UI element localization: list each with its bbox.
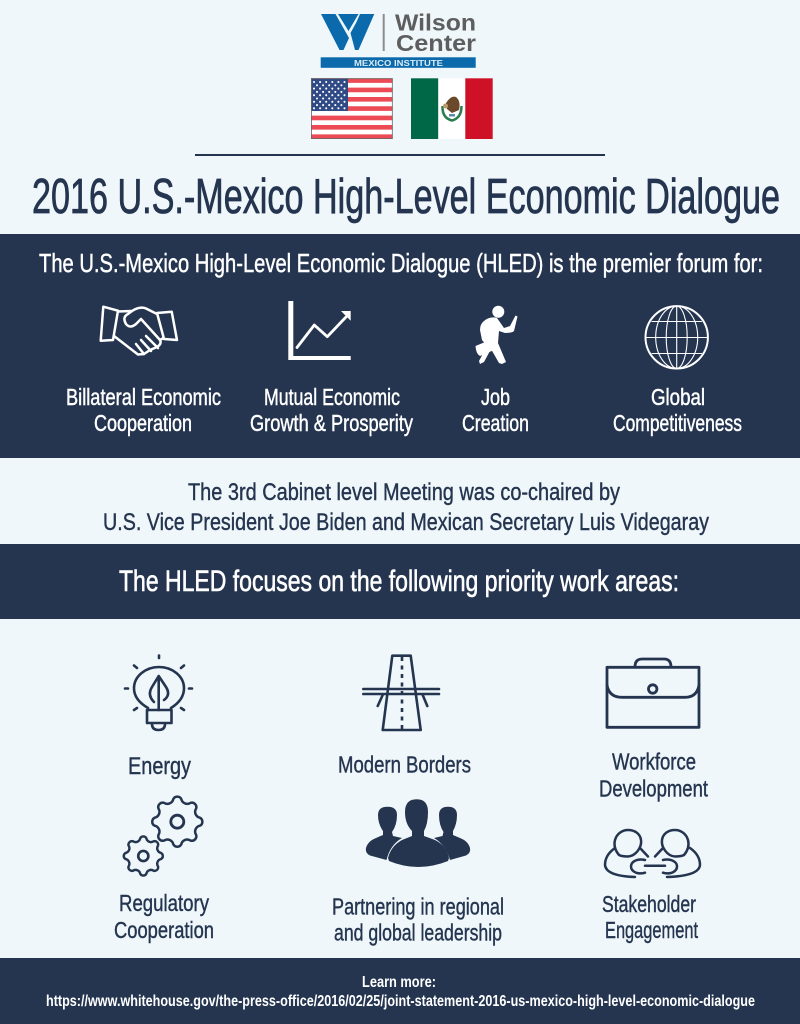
label: regulatory cooperation xyxy=(114,890,214,943)
label: stakeholder engagement: Engagement xyxy=(605,917,698,943)
icon: handshake xyxy=(101,307,177,354)
flag: United States xyxy=(311,78,393,139)
panel: premier forum xyxy=(0,234,800,458)
icon: modern borders highway xyxy=(363,656,439,730)
label: stakeholder engagement: Stakeholder xyxy=(602,891,696,917)
label: job creation: Job xyxy=(481,384,510,410)
text block: co-chairs xyxy=(103,479,709,536)
label: partnering in regional and global leadership: Partnering in regional xyxy=(332,894,504,920)
icon: workforce briefcase xyxy=(607,659,699,727)
flag: Mexico xyxy=(411,78,493,139)
large gear xyxy=(152,797,202,847)
label: bilateral cooperation: Cooperation xyxy=(94,410,192,436)
label: regulatory cooperation: Cooperation xyxy=(114,917,214,943)
label: growth and prosperity xyxy=(250,384,413,436)
panel: footer learn more xyxy=(0,958,800,1024)
small gear xyxy=(124,836,163,876)
label: global competitiveness: Competitiveness xyxy=(613,410,742,436)
panel: priority work areas heading xyxy=(0,544,800,619)
label: partnering in regional and global leadership: and global leadership xyxy=(334,920,502,946)
label: workforce development: Development xyxy=(599,776,708,802)
label: growth and prosperity: Growth & Prosperity xyxy=(250,410,413,436)
icon: growth chart xyxy=(288,301,351,360)
label: workforce development xyxy=(599,748,708,802)
label: job creation: Creation xyxy=(462,410,529,436)
label: job creation xyxy=(462,384,529,436)
label: bilateral cooperation xyxy=(66,384,221,436)
label: partnering in regional and global leadership xyxy=(332,894,504,946)
icon: energy light bulb xyxy=(125,656,192,730)
logo mark: W xyxy=(321,14,374,50)
icon: regulatory gears xyxy=(124,797,202,876)
icon: globe xyxy=(646,306,708,368)
logo: Wilson Center Mexico Institute xyxy=(321,10,476,68)
text block: co-chairs: The 3rd Cabinet level Meeting was co-chaired by xyxy=(188,479,620,506)
label: global competitiveness: Global xyxy=(651,384,705,410)
label: regulatory cooperation: Regulatory xyxy=(119,890,209,916)
label: growth and prosperity: Mutual Economic xyxy=(264,384,400,410)
icon: job seeker with briefcase xyxy=(476,306,518,364)
label: energy: Energy xyxy=(128,753,191,780)
icon: stakeholder engagement xyxy=(605,830,700,877)
label: global competitiveness xyxy=(613,384,742,436)
logo: Wilson Center Mexico Institute: Center xyxy=(396,30,476,56)
logo: Wilson Center Mexico Institute: MEXICO INSTITUTE xyxy=(354,58,443,68)
logo: Wilson Center Mexico Institute: Wilson xyxy=(395,10,476,36)
label: modern borders: Modern Borders xyxy=(338,752,471,778)
label: workforce development: Workforce xyxy=(612,748,696,774)
label: stakeholder engagement xyxy=(602,891,698,943)
label: bilateral cooperation: Billateral Economic xyxy=(66,384,221,410)
panel: footer learn more: Learn more: xyxy=(362,974,436,991)
divider line xyxy=(195,154,605,156)
icon: people group xyxy=(366,799,470,867)
